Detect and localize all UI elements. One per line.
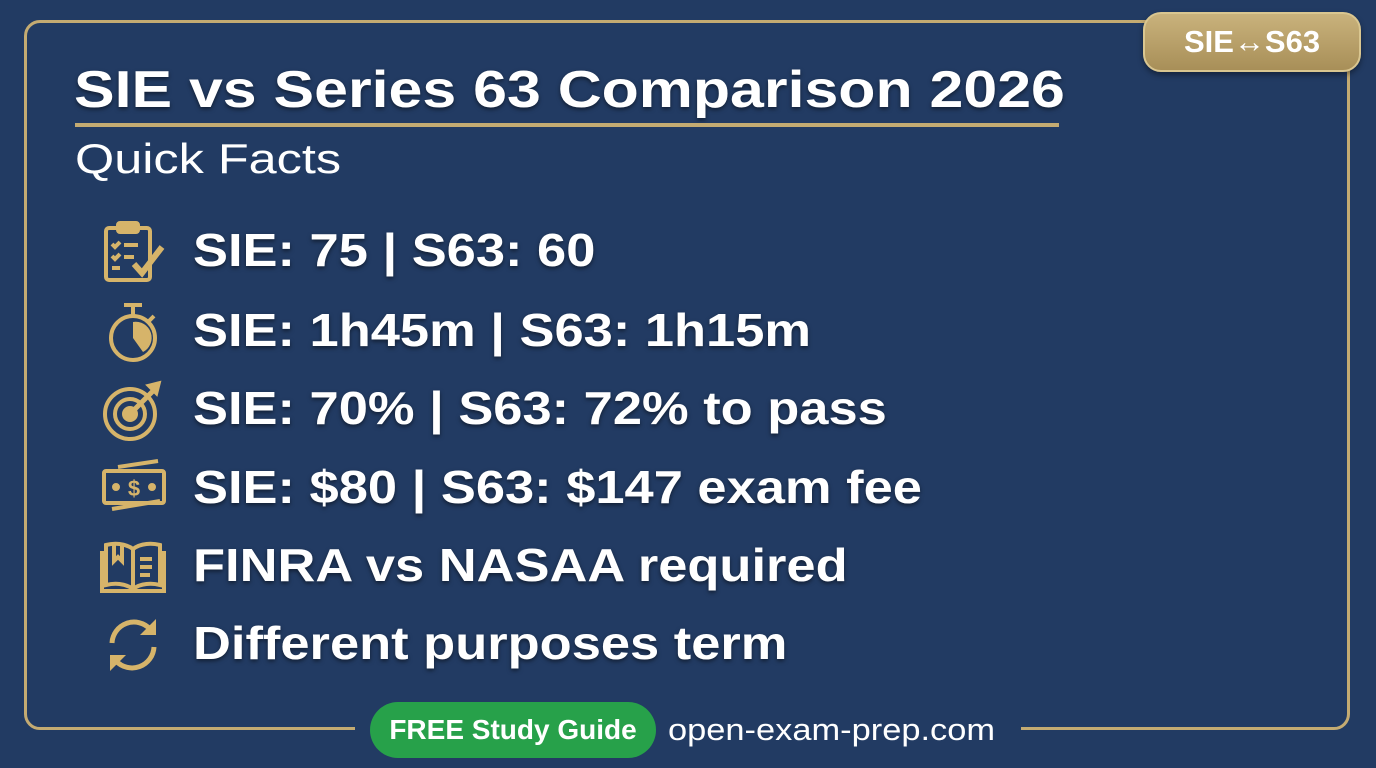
button: free study guide: FREE Study Guide — [389, 714, 637, 745]
footer — [370, 702, 995, 758]
fact row: purposes: Different purposes term — [193, 617, 787, 669]
fact row: questions — [104, 221, 596, 282]
fact row: questions: SIE: 75 | S63: 60 — [193, 224, 595, 276]
badge: SIE to S63: SIE↔S63 — [1184, 24, 1320, 59]
icon: open book — [100, 542, 166, 593]
fact row: time: SIE: 1h45m | S63: 1h15m — [193, 304, 811, 356]
fact row: fee: SIE: $80 | S63: $147 exam fee — [193, 461, 922, 513]
footer url: open-exam-prep.com — [668, 712, 995, 747]
fact row: regulator: FINRA vs NASAA required — [193, 539, 848, 591]
icon: refresh arrows — [110, 619, 156, 671]
icon: clipboard — [104, 221, 164, 282]
icon: stopwatch — [109, 303, 157, 362]
fact row: passing score: SIE: 70% | S63: 72% to pass — [193, 382, 887, 434]
subtitle: Quick Facts — [75, 135, 341, 182]
icon: money: $ — [128, 476, 140, 501]
title: SIE vs Series 63 Comparison 2026 — [74, 61, 1065, 119]
button: free study guide — [370, 702, 656, 758]
icon: target — [103, 380, 162, 441]
icon: money — [102, 459, 166, 511]
badge: SIE to S63 — [1143, 12, 1361, 72]
